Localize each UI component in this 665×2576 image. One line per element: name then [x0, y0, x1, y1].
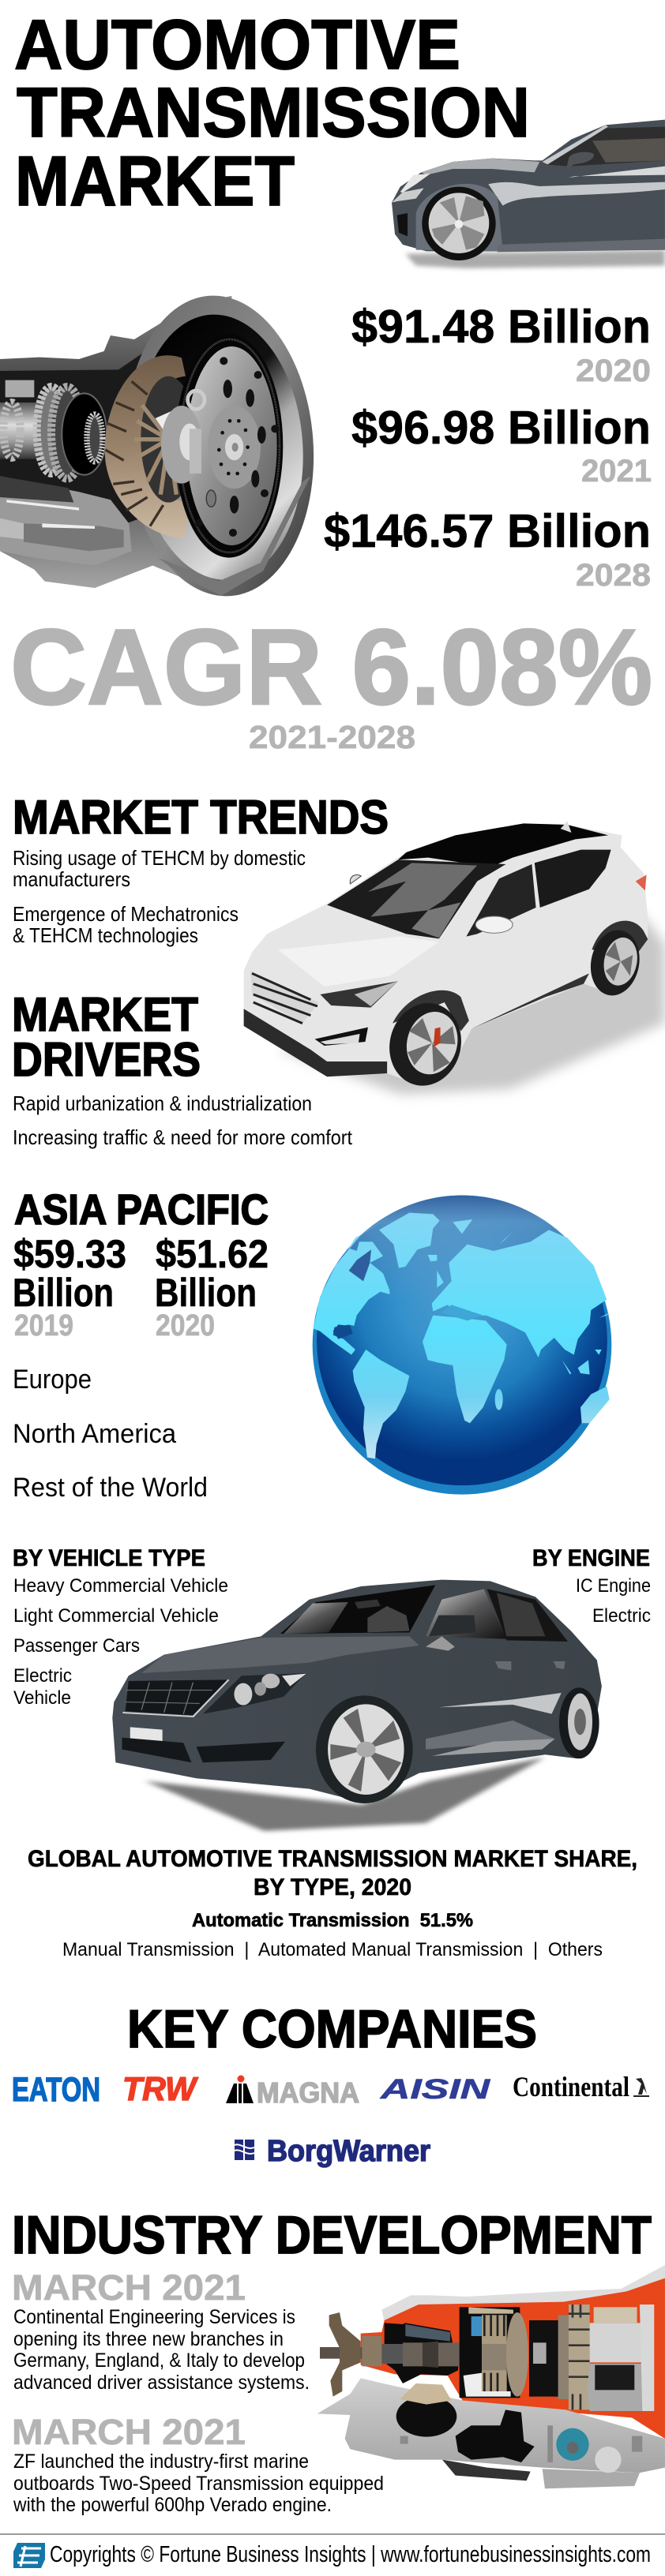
icon: globe — [313, 1195, 611, 1495]
heading: market drivers — [12, 988, 201, 1086]
text: market trends list: manufacturers — [13, 867, 130, 891]
stat: 2020 value — [351, 301, 651, 388]
chart heading: market share by type: BY TYPE, 2020 — [254, 1874, 411, 1900]
title: TRANSMISSION — [17, 73, 530, 152]
text: vehicle types: Light Commercial Vehicle — [13, 1605, 219, 1627]
text: vehicle types: Passenger Cars — [13, 1635, 140, 1657]
heading: key companies: KEY COMPANIES — [127, 1999, 537, 2059]
event: March 2021 Continental: advanced driver assistance systems. — [13, 2372, 310, 2394]
text: other regions: Rest of the World — [13, 1473, 208, 1503]
icon: orange cutaway gearbox — [317, 2265, 665, 2488]
event: March 2021 Continental: Continental Engineering Services is — [13, 2306, 295, 2328]
callout: automatic transmission share: Automatic Transmission 51.5% — [192, 1910, 473, 1931]
event: March 2021 ZF — [12, 2412, 384, 2516]
text: vehicle types: Vehicle — [13, 1687, 71, 1709]
stat: asia pacific 2020: 2020 — [156, 1309, 215, 1342]
text: market trends list: Emergence of Mechatronics — [13, 902, 239, 926]
logo: Aisin: AISIN — [380, 2074, 490, 2105]
logo: Magna: MAGNA — [257, 2076, 359, 2109]
stat: asia pacific 2019 — [13, 1232, 126, 1342]
text: other transmission types: Manual Transmission | Automated Manual Transmission | Others — [62, 1939, 603, 1960]
stat: asia pacific 2019: Billion — [13, 1271, 114, 1315]
event: March 2021 ZF: with the powerful 600hp Verado engine. — [13, 2494, 332, 2516]
stat: asia pacific 2019: $59.33 — [13, 1232, 126, 1276]
stat: 2021 value: 2021 — [581, 454, 652, 489]
text: vehicle types: Heavy Commercial Vehicle — [13, 1575, 228, 1597]
stat: asia pacific 2020: Billion — [155, 1271, 257, 1315]
text: other regions: North America — [13, 1419, 176, 1449]
event: March 2021 ZF: ZF launched the industry-first marine — [13, 2451, 309, 2473]
text: vehicle types: Electric — [13, 1665, 72, 1687]
event: March 2021 Continental: opening its three new branches in — [13, 2328, 284, 2350]
title: MARKET — [15, 141, 295, 220]
icon: grey sports car — [392, 120, 665, 268]
heading: market trends: MARKET TRENDS — [13, 791, 389, 844]
logo: Continental: Continental — [513, 2071, 629, 2102]
stat: 2020 value: $91.48 Billion — [351, 301, 651, 353]
logo: BorgWarner: BorgWarner — [267, 2135, 430, 2168]
stat: asia pacific 2020: $51.62 — [156, 1232, 269, 1276]
title: AUTOMOTIVE — [14, 5, 460, 84]
heading: market drivers: DRIVERS — [12, 1033, 201, 1086]
chart heading: market share by type: GLOBAL AUTOMOTIVE TRANSMISSION MARKET SHARE, — [28, 1846, 637, 1872]
stat: 2028 value — [324, 505, 651, 593]
stat: 2021 value: $96.98 Billion — [351, 402, 651, 454]
text: market trends list: Rising usage of TEHCM by domestic — [13, 846, 306, 870]
stat: 2021 value — [351, 402, 652, 489]
text: market drivers list — [13, 1091, 353, 1149]
heading: by vehicle type: BY VEHICLE TYPE — [13, 1545, 205, 1571]
stat: 2028 value: 2028 — [576, 558, 651, 593]
icon: dark sedan — [112, 1580, 602, 1831]
text: market drivers list: Rapid urbanization & industrialization — [13, 1091, 312, 1115]
title — [14, 5, 530, 220]
stat: 2028 value: $146.57 Billion — [324, 505, 651, 557]
logo: TRW: TRW — [122, 2070, 198, 2107]
event: March 2021 Continental: Germany, England, & Italy to develop — [13, 2349, 305, 2372]
icon: white SUV — [244, 822, 665, 1095]
icon: cutaway transmission — [0, 290, 324, 602]
heading: by engine: BY ENGINE — [532, 1545, 650, 1571]
text: engine types: Electric — [592, 1605, 651, 1627]
text: other regions: Europe — [13, 1365, 92, 1395]
event: March 2021 Continental — [12, 2267, 310, 2394]
CAGR callout: 2021-2028 — [249, 719, 415, 755]
event: March 2021 ZF: MARCH 2021 — [12, 2412, 246, 2452]
heading: market drivers: MARKET — [12, 988, 198, 1041]
text: market trends list — [13, 846, 306, 947]
text: other regions — [13, 1365, 208, 1503]
stat: asia pacific 2020 — [155, 1232, 269, 1342]
text: market drivers list: Increasing traffic & need for more comfort — [13, 1125, 353, 1149]
logo: Eaton: EATON — [12, 2071, 100, 2109]
stat: 2020 value: 2020 — [576, 354, 651, 388]
event: March 2021 Continental: MARCH 2021 — [12, 2267, 246, 2308]
text: vehicle types — [13, 1575, 228, 1709]
event: March 2021 ZF: outboards Two-Speed Transmission equipped — [13, 2473, 384, 2495]
text: engine types — [576, 1575, 651, 1627]
CAGR callout: CAGR 6.08% — [10, 607, 652, 727]
chart heading: market share by type — [28, 1846, 637, 1900]
stat: asia pacific 2019: 2019 — [14, 1309, 73, 1342]
icon: Fortune Business Insights logo — [13, 2543, 45, 2568]
text: engine types: IC Engine — [576, 1575, 651, 1597]
heading: asia pacific: ASIA PACIFIC — [14, 1186, 269, 1234]
text: market trends list: & TEHCM technologies — [13, 923, 198, 947]
